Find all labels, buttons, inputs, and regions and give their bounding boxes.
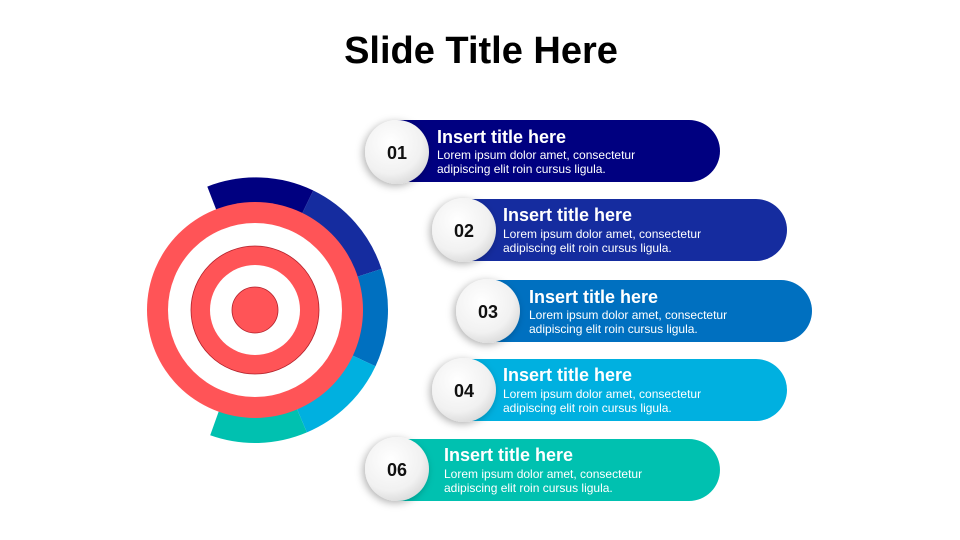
item 03 (456, 279, 812, 343)
item 06: 06 (387, 460, 407, 480)
arc segment 3 (255, 269, 388, 366)
item 01: 01 (387, 143, 407, 163)
item 02: Lorem ipsum dolor amet, consectetur (503, 227, 701, 241)
arc segment 5 (210, 310, 307, 443)
item 06: Lorem ipsum dolor amet, consectetur (444, 467, 642, 481)
item 02: 02 (454, 221, 474, 241)
item 03: 03 (478, 302, 498, 322)
item 06: Insert title here (444, 445, 573, 465)
title: Slide Title Here (344, 30, 618, 72)
item 06 (365, 437, 720, 501)
item 06: adipiscing elit roin cursus ligula. (444, 481, 613, 495)
chart: target with arc segments (147, 177, 388, 443)
item 04: 04 (454, 381, 474, 401)
item 02 (432, 198, 787, 262)
item 04: Insert title here (503, 365, 632, 385)
item 04: adipiscing elit roin cursus ligula. (503, 401, 672, 415)
item 04: Lorem ipsum dolor amet, consectetur (503, 387, 701, 401)
item 03: adipiscing elit roin cursus ligula. (529, 322, 698, 336)
target rings (147, 202, 363, 418)
item 03: Insert title here (529, 287, 658, 307)
item 02: Insert title here (503, 205, 632, 225)
item 01: Insert title here (437, 127, 566, 147)
item 04 (432, 358, 787, 422)
item 01: adipiscing elit roin cursus ligula. (437, 162, 606, 176)
item 01: Lorem ipsum dolor amet, consectetur (437, 148, 635, 162)
item 01 (365, 120, 720, 184)
item 02: adipiscing elit roin cursus ligula. (503, 241, 672, 255)
item 03: Lorem ipsum dolor amet, consectetur (529, 308, 727, 322)
arc segment 4 (255, 310, 376, 432)
arc segment 2 (255, 190, 382, 310)
arc segment 1 (207, 177, 313, 310)
